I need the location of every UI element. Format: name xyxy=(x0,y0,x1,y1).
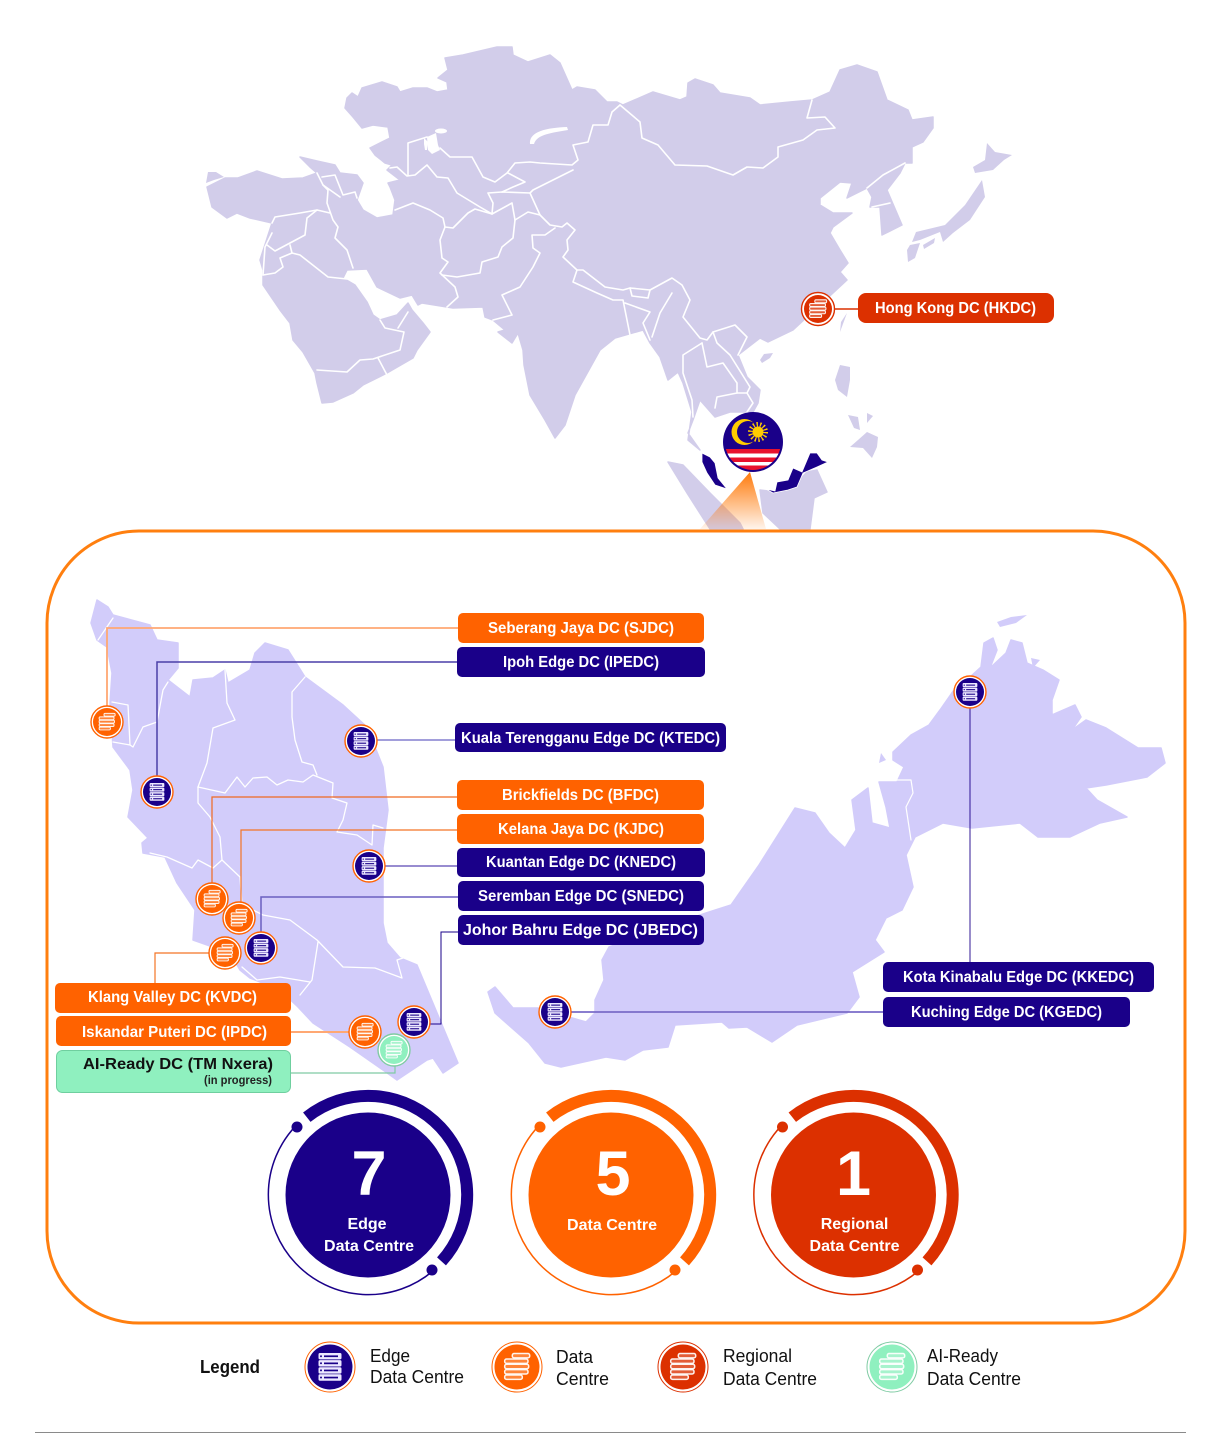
icon: Kuching Edge DC xyxy=(539,996,571,1028)
national borders xyxy=(263,100,905,417)
label: Brickfields DC: Brickfields DC (BFDC) xyxy=(502,787,659,804)
label: Seremban Edge DC xyxy=(458,881,704,911)
label: Johor Bahru Edge DC: Johor Bahru Edge DC (JBEDC) xyxy=(463,922,698,939)
legend text: AI-Ready Data Centre: Data Centre xyxy=(927,1369,1021,1389)
island: Sumatra xyxy=(668,462,743,529)
islands: Labuan and Banggi xyxy=(879,615,1040,763)
stat: 5 Data Centre: Data Centre xyxy=(567,1217,657,1234)
legend text: Data Centre: Data xyxy=(556,1347,594,1367)
legend text: Regional Data Centre: Regional xyxy=(723,1346,792,1366)
label: Seberang Jaya DC: Seberang Jaya DC (SJDC) xyxy=(488,620,674,637)
label: Kota Kinabalu Edge DC xyxy=(883,962,1154,992)
connector: Hong Kong xyxy=(835,308,858,310)
islands: Japan, Taiwan, Philippines, Thrace xyxy=(206,143,1012,458)
label: AI-Ready DC: (in progress) xyxy=(204,1075,272,1087)
icon: Klang Valley DC xyxy=(209,937,241,969)
legend text: Edge Data Centre xyxy=(370,1346,464,1387)
label: Kuching Edge DC: Kuching Edge DC (KGEDC) xyxy=(911,1004,1102,1021)
legend icon: AI-Ready Data Centre xyxy=(867,1342,917,1392)
stat: 5 Data Centre xyxy=(511,1096,710,1295)
landmass: mainland Asia xyxy=(207,47,933,450)
icon: Seremban Edge DC xyxy=(245,932,277,964)
icon: Kuantan Edge DC xyxy=(353,850,385,882)
legend xyxy=(200,1342,1021,1392)
stat: 7 Edge Data Centre: Edge xyxy=(347,1216,387,1233)
highlight: East Malaysia xyxy=(766,453,828,493)
label: Seberang Jaya DC xyxy=(458,613,704,643)
label: Hong Kong DC: Hong Kong DC (HKDC) xyxy=(875,300,1036,317)
map: Peninsular Malaysia xyxy=(91,600,458,1080)
stat: 1 Regional Data Centre: Data Centre xyxy=(810,1238,900,1255)
legend icon: Regional Data Centre xyxy=(658,1342,708,1392)
stat: 1 Regional Data Centre: Regional xyxy=(821,1216,888,1233)
map: Asia xyxy=(206,47,1012,529)
icon: Kelana Jaya DC xyxy=(223,902,255,934)
icon: Brickfields DC xyxy=(196,883,228,915)
label: Klang Valley DC xyxy=(55,983,291,1013)
legend icon: Edge Data Centre xyxy=(305,1342,355,1392)
label: AI-Ready DC xyxy=(56,1050,290,1092)
label: Iskandar Puteri DC: Iskandar Puteri DC (IPDC) xyxy=(82,1024,267,1041)
panel: Malaysia data centres xyxy=(47,531,1185,1323)
label: Ipoh Edge DC xyxy=(457,647,705,677)
label: Kuala Terengganu Edge DC: Kuala Terengganu Edge DC (KTEDC) xyxy=(461,730,720,747)
label: Iskandar Puteri DC xyxy=(56,1016,291,1046)
legend heading: Legend xyxy=(200,1357,260,1377)
stat: 1 Regional Data Centre xyxy=(754,1096,953,1295)
legend text: Data Centre: Centre xyxy=(556,1369,609,1389)
label: Ipoh Edge DC: Ipoh Edge DC (IPEDC) xyxy=(503,654,659,671)
lakes: Aral and Balkhash xyxy=(373,127,568,315)
legend text: Edge Data Centre: Edge xyxy=(370,1346,410,1366)
icon: Seberang Jaya DC xyxy=(91,706,123,738)
label: Kota Kinabalu Edge DC: Kota Kinabalu Edge DC (KKEDC) xyxy=(903,969,1134,986)
connectors xyxy=(107,628,970,1073)
icon: Johor Bahru Edge DC xyxy=(398,1006,430,1038)
island: Borneo xyxy=(760,470,827,529)
stat: 5 Data Centre: 5 xyxy=(595,1139,631,1209)
highlight: Peninsular Malaysia xyxy=(702,453,727,489)
map: East Malaysia xyxy=(488,615,1165,1067)
legend text: Regional Data Centre xyxy=(723,1346,817,1389)
border: Sarawak and Sabah xyxy=(895,780,913,840)
landmass: Peninsular Malaysia xyxy=(91,600,458,1080)
icon: Malaysia flag xyxy=(723,412,783,472)
icon: Iskandar Puteri DC xyxy=(349,1016,381,1048)
icon: Ipoh Edge DC xyxy=(141,776,173,808)
label: Kuala Terengganu Edge DC xyxy=(455,723,726,752)
stat: 7 Edge Data Centre: Data Centre xyxy=(324,1238,414,1255)
icon: Hong Kong DC xyxy=(802,292,834,326)
label: Brickfields DC xyxy=(457,780,704,810)
label: Kelana Jaya DC xyxy=(457,814,704,844)
label: Klang Valley DC: Klang Valley DC (KVDC) xyxy=(88,989,257,1006)
label: Seremban Edge DC: Seremban Edge DC (SNEDC) xyxy=(478,888,684,905)
icon: Kota Kinabalu Edge DC xyxy=(954,676,986,708)
stat: 1 Regional Data Centre: 1 xyxy=(836,1139,871,1209)
label: Kelana Jaya DC: Kelana Jaya DC (KJDC) xyxy=(498,821,664,838)
icon: Kuala Terengganu Edge DC xyxy=(345,725,377,757)
label: AI-Ready DC: AI-Ready DC (TM Nxera) xyxy=(83,1056,273,1073)
stat: 7 Edge Data Centre: 7 xyxy=(351,1139,387,1209)
label: Hong Kong DC xyxy=(858,293,1054,323)
state borders: Peninsular Malaysia xyxy=(98,618,403,995)
icon: AI-Ready DC xyxy=(378,1034,410,1066)
legend text: Edge Data Centre: Data Centre xyxy=(370,1367,464,1387)
legend text: Regional Data Centre: Data Centre xyxy=(723,1369,817,1389)
legend icon: Data Centre xyxy=(492,1342,542,1392)
legend text: AI-Ready Data Centre: AI-Ready xyxy=(927,1346,998,1366)
landmass: Sarawak and Sabah xyxy=(488,638,1165,1067)
stat: 7 Edge Data Centre xyxy=(268,1096,467,1295)
label: Kuantan Edge DC: Kuantan Edge DC (KNEDC) xyxy=(486,854,676,871)
legend text: Data Centre xyxy=(556,1347,609,1389)
label: Kuching Edge DC xyxy=(883,997,1130,1027)
legend text: AI-Ready Data Centre xyxy=(927,1346,1021,1389)
label: Kuantan Edge DC xyxy=(457,848,705,877)
label: Johor Bahru Edge DC xyxy=(458,915,704,945)
flag pointer beam xyxy=(700,472,766,529)
